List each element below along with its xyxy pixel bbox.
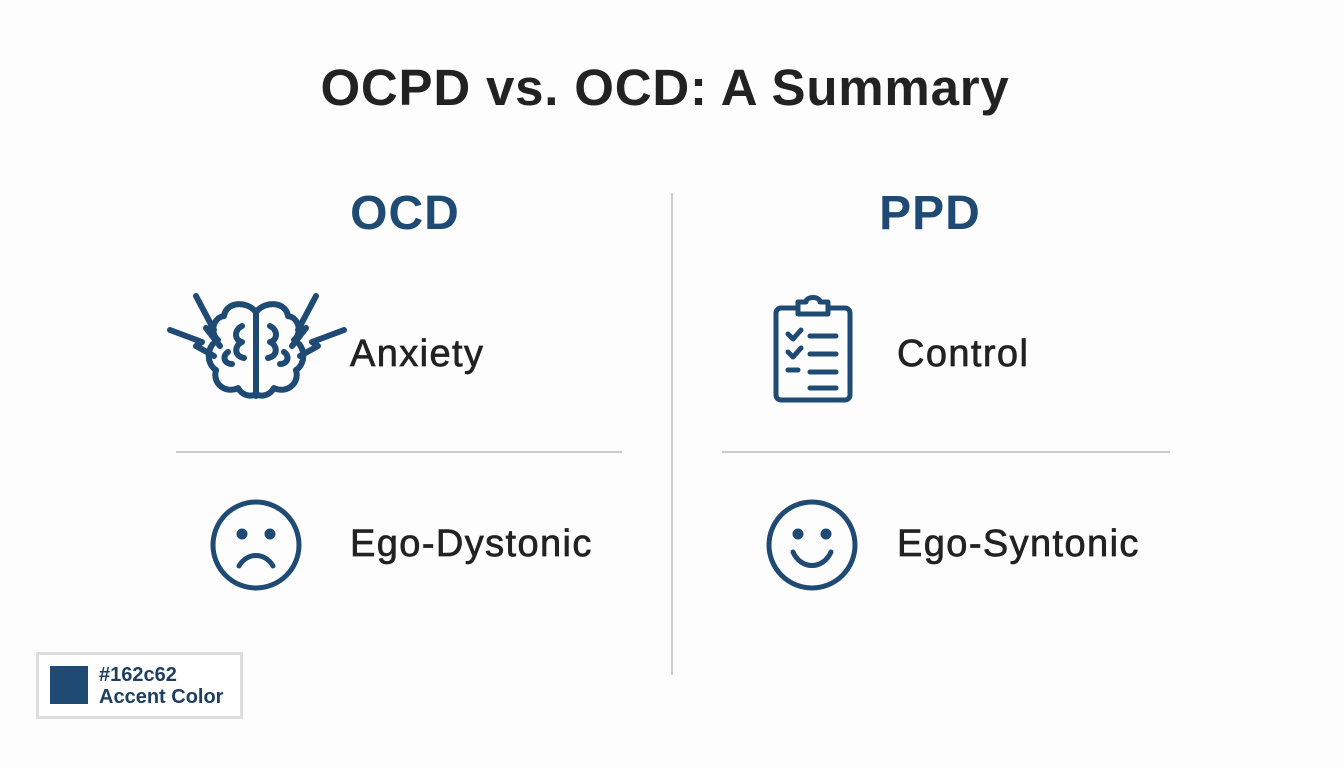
- text: Control: Control: [897, 333, 1029, 375]
- divider right: [722, 451, 1170, 453]
- heading: OCD: OCD: [350, 187, 460, 240]
- title: OCPD vs. OCD: A Summary: [320, 59, 1010, 116]
- legend text: [99, 664, 224, 708]
- icon: sad face: [210, 500, 302, 590]
- legend text: #162c62: [99, 664, 177, 686]
- heading: PPD: PPD: [879, 187, 981, 240]
- icon: brain with lightning: [167, 293, 347, 399]
- legend text: Accent Color: [99, 686, 223, 708]
- divider vertical: [671, 193, 673, 675]
- divider left: [176, 451, 622, 453]
- icon: clipboard: [774, 295, 852, 402]
- icon: smiley face: [766, 500, 858, 590]
- legend swatch: [50, 666, 88, 704]
- text: Anxiety: Anxiety: [350, 333, 484, 375]
- text: Ego-Syntonic: Ego-Syntonic: [897, 523, 1140, 565]
- legend: [36, 652, 243, 719]
- text: Ego-Dystonic: Ego-Dystonic: [350, 523, 593, 565]
